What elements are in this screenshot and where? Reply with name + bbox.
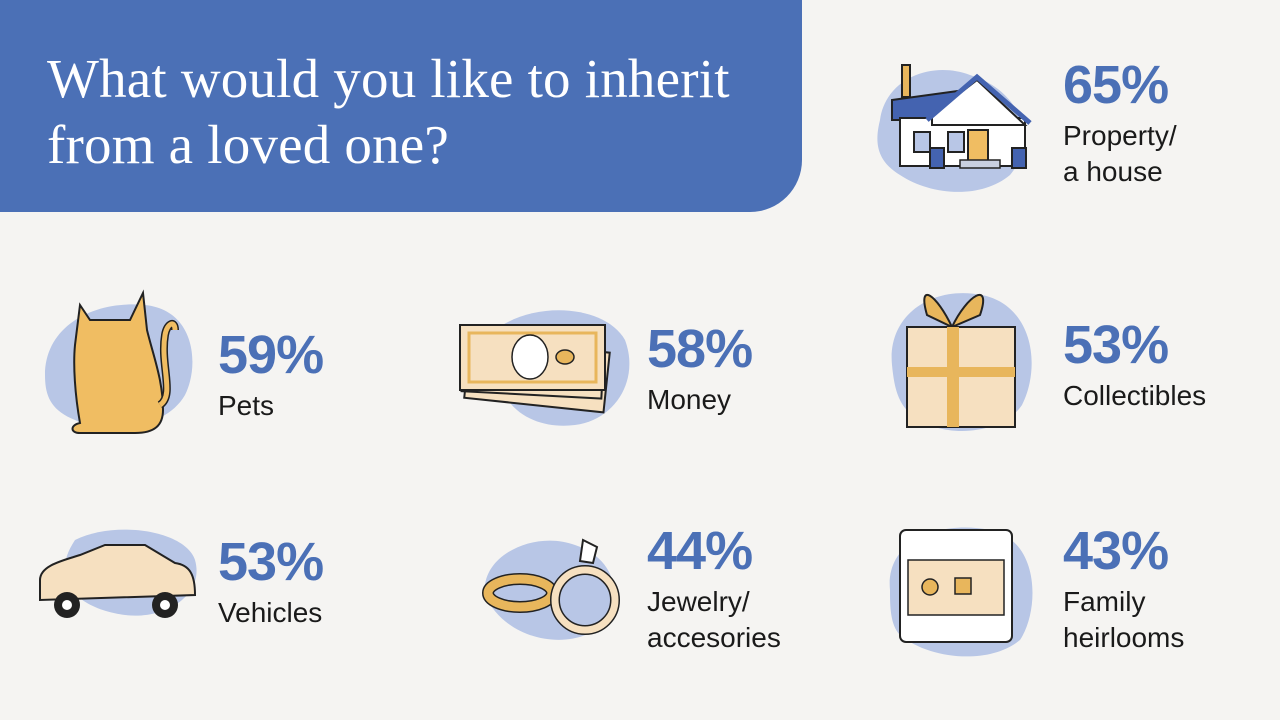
stat: property (1063, 55, 1177, 187)
stat: heirlooms: heirlooms (1063, 622, 1184, 653)
stat: property: a house (1063, 156, 1163, 187)
icon: ring (482, 538, 620, 640)
title: from a loved one? (47, 114, 449, 175)
stat: vehicles: 53% (218, 532, 323, 592)
icon: car (39, 530, 196, 618)
stat: heirlooms (1063, 521, 1184, 653)
stat: money: Money (647, 384, 731, 415)
stat: jewelry (647, 521, 781, 653)
stat: collectibles: 53% (1063, 315, 1168, 375)
icon: money (459, 310, 630, 426)
title banner (0, 0, 802, 212)
icon: cat (45, 290, 192, 434)
stat: property: 65% (1063, 55, 1168, 115)
icon: safe (890, 528, 1032, 656)
stat: pets (218, 325, 323, 421)
stat: property: Property/ (1063, 120, 1177, 151)
icon: gift (892, 293, 1032, 431)
stat: heirlooms: 43% (1063, 521, 1168, 581)
title: What would you like to inherit (47, 48, 730, 109)
stat: collectibles (1063, 315, 1206, 411)
stat: money (647, 319, 752, 415)
stat: vehicles: Vehicles (218, 597, 322, 628)
stat: heirlooms: Family (1063, 586, 1145, 617)
stat: jewelry: 44% (647, 521, 752, 581)
title (47, 48, 730, 175)
icon: house (877, 64, 1032, 192)
stat: pets: 59% (218, 325, 323, 385)
stat: jewelry: Jewelry/ (647, 586, 750, 617)
stat: jewelry: accesories (647, 622, 781, 653)
stat: collectibles: Collectibles (1063, 380, 1206, 411)
stat: money: 58% (647, 319, 752, 379)
stat: pets: Pets (218, 390, 274, 421)
stat: vehicles (218, 532, 323, 628)
